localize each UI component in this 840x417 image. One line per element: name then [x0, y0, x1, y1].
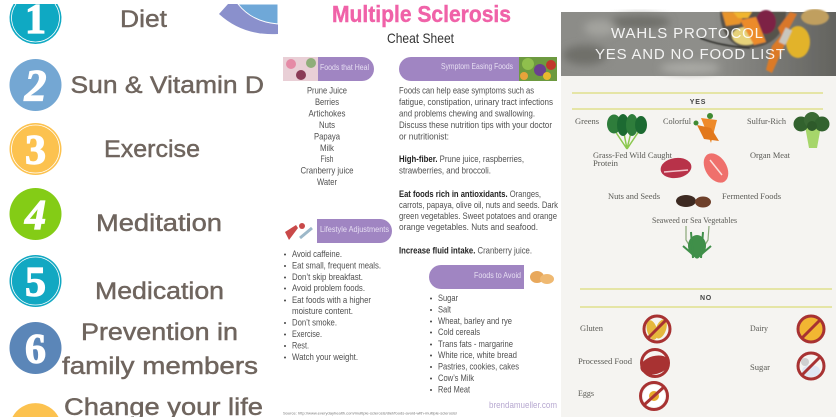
list: foods that heal: Fish — [320, 154, 334, 164]
list: lifestyle adjustments: moisture content. — [292, 306, 353, 316]
list: lifestyle adjustments: Eat foods with a higher — [292, 295, 371, 305]
list: foods that heal: Prune Juice — [307, 86, 347, 96]
list: foods that heal: Nuts — [319, 120, 335, 130]
list: lifestyle adjustments: Eat small, frequent meals. — [292, 260, 381, 270]
label: grass-fed wild caught protein: Protein — [593, 159, 619, 168]
list: foods that heal — [300, 86, 354, 187]
list: foods to avoid: Trans fats - margarine — [438, 339, 513, 349]
list: foods to avoid: Sugar — [438, 293, 458, 303]
icon: carrots — [694, 113, 719, 143]
label: fermented foods: Fermented Foods — [722, 192, 781, 201]
label: gluten: Gluten — [580, 324, 604, 333]
panel: wahls protocol food list — [561, 9, 836, 417]
list: foods to avoid: White rice, white bread — [438, 350, 517, 360]
text: symptom easing foods — [399, 86, 558, 256]
heading: yes: YES — [690, 99, 706, 106]
icon: seaweed — [683, 226, 711, 258]
icon: number 7 — [12, 403, 58, 417]
text: symptom easing foods: Foods can help ease symptoms such as — [399, 86, 534, 96]
list: foods that heal: Water — [317, 177, 337, 187]
credit: source: Source: http://www.everydayhealth.com/multiple-sclerosis/diet/foods-avoid-with-multiple-sclerosis/ — [283, 410, 458, 416]
panel: multiple sclerosis cheat sheet — [283, 1, 558, 416]
list: foods to avoid: Pastries, cookies, cakes — [438, 362, 519, 372]
heading: foods that heal — [283, 57, 374, 81]
label: sulfur-rich: Sulfur-Rich — [747, 117, 787, 126]
label: sun and vitamin D: Sun & Vitamin D — [70, 72, 264, 99]
list: foods that heal: Milk — [320, 143, 334, 153]
list: lifestyle adjustments: Watch your weight. — [292, 352, 358, 362]
list: foods that heal: Papaya — [314, 132, 341, 142]
label: nuts and seeds: Nuts and Seeds — [608, 192, 660, 201]
label: eggs: Eggs — [578, 389, 594, 398]
label: diet: Diet — [120, 6, 167, 33]
text: symptom easing foods: fatigue, constipation, urinary tract infections — [399, 97, 553, 107]
heading: foods that heal: Foods that Heal — [320, 63, 369, 72]
label: grass-fed wild caught protein — [593, 151, 673, 168]
icon: steak — [659, 156, 693, 180]
list: foods to avoid: Salt — [438, 304, 451, 314]
credit: website: brendamueller.com — [489, 400, 557, 410]
icon: spinach — [607, 114, 647, 149]
label: greens: Greens — [575, 117, 599, 126]
heading: no: NO — [700, 295, 712, 302]
heading: foods to avoid: Foods to Avoid — [474, 271, 521, 280]
list: foods to avoid: Red Meat — [438, 384, 470, 394]
list: foods to avoid: Cold cereals — [438, 327, 480, 337]
icon: salmon — [699, 149, 733, 187]
panel: numbered steps — [10, 0, 278, 417]
icon: number 2: 2 — [24, 61, 46, 110]
header: title: WAHLS PROTOCOL — [611, 25, 763, 42]
label: prevention in family members: family members — [62, 353, 258, 380]
heading: symptom easing foods: Symptom Easing Foods — [441, 62, 513, 71]
icon: number 3: 3 — [25, 128, 46, 174]
text: symptom easing foods: High-fiber. Prune juice, raspberries, — [399, 154, 524, 164]
icon: number 6 — [10, 322, 62, 374]
list: foods to avoid: Wheat, barley and rye — [438, 316, 512, 326]
header: title — [595, 25, 785, 63]
heading: lifestyle adjustments: Lifestyle Adjustments — [320, 225, 389, 234]
label: grass-fed wild caught protein: Grass-Fed Wild Caught — [593, 151, 673, 160]
icon: no gluten — [644, 316, 670, 342]
label: seaweed or sea vegetables: Seaweed or Sea Vegetables — [652, 216, 737, 225]
text: symptom easing foods: Eat foods rich in antioxidants. Oranges, — [399, 189, 541, 199]
label: colorful: Colorful — [663, 117, 692, 126]
header: title: YES AND NO FOOD LIST — [595, 46, 785, 63]
icon: number 2 — [10, 59, 62, 111]
list: lifestyle adjustments: Don’t smoke. — [292, 318, 337, 328]
list: foods that heal: Artichokes — [308, 108, 346, 118]
text: symptom easing foods: green vegetables. Sweet potatoes and orange — [399, 211, 557, 221]
label: processed food: Processed Food — [578, 357, 633, 366]
header banner — [561, 9, 836, 76]
label: medication: Medication — [95, 278, 224, 305]
label: meditation: Meditation — [96, 210, 222, 237]
label: prevention in family members — [62, 319, 258, 380]
text: symptom easing foods: or nutritionist: — [399, 132, 449, 142]
label: sugar: Sugar — [750, 363, 770, 372]
label: dairy: Dairy — [750, 324, 769, 333]
header: vegetables photo — [700, 9, 829, 73]
icon: corner arc decoration — [219, 4, 278, 34]
list: foods to avoid — [430, 293, 519, 394]
text: symptom easing foods: strawberries, and broccoli. — [399, 166, 491, 176]
list: lifestyle adjustments — [284, 249, 381, 362]
icon: number 1 — [10, 0, 62, 44]
list: lifestyle adjustments: Rest. — [292, 340, 309, 350]
label: exercise: Exercise — [104, 136, 200, 163]
icon: nuts — [676, 195, 711, 208]
icon: number 4: 4 — [24, 193, 46, 239]
label: organ meat: Organ Meat — [750, 151, 791, 160]
icon: number 5: 5 — [25, 260, 46, 306]
icon: number 6: 6 — [25, 327, 46, 373]
icon: no sugar — [798, 353, 824, 379]
label: prevention in family members: Prevention in — [81, 319, 238, 346]
icon: no eggs — [640, 382, 668, 410]
icon: no processed food — [638, 350, 672, 378]
text: symptom easing foods: and problems chewing and swallowing. — [399, 108, 535, 118]
list: foods that heal: Cranberry juice — [300, 166, 354, 176]
icon: broccoli — [794, 112, 830, 148]
list: foods that heal: Berries — [315, 97, 339, 107]
list: foods to avoid: Cow’s Milk — [438, 373, 474, 383]
heading: foods to avoid — [429, 265, 554, 289]
icon: number 5 — [10, 255, 62, 307]
icon: no dairy — [798, 316, 824, 342]
subtitle: Cheat Sheet — [387, 30, 454, 46]
icon: number 3 — [10, 123, 62, 175]
text: symptom easing foods: Discuss these nutrition tips with your doctor — [399, 120, 552, 130]
heading: lifestyle adjustments — [285, 219, 392, 243]
list: lifestyle adjustments: Avoid caffeine. — [292, 249, 342, 259]
header: stone texture — [563, 15, 720, 74]
text: symptom easing foods: carrots, papaya, olive oil, nuts and seeds. Dark — [399, 200, 558, 210]
list: lifestyle adjustments: Don’t skip breakfast. — [292, 272, 363, 282]
list: lifestyle adjustments: Avoid problem foods. — [292, 283, 365, 293]
icon: number 4 — [10, 188, 62, 240]
title: Multiple Sclerosis — [332, 1, 511, 27]
text: symptom easing foods: Increase fluid intake. Cranberry juice. — [399, 246, 532, 256]
list: lifestyle adjustments: Exercise. — [292, 329, 322, 339]
text: symptom easing foods: orange vegetables. Nuts and seafood. — [399, 222, 538, 232]
heading: symptom easing foods — [399, 57, 557, 81]
